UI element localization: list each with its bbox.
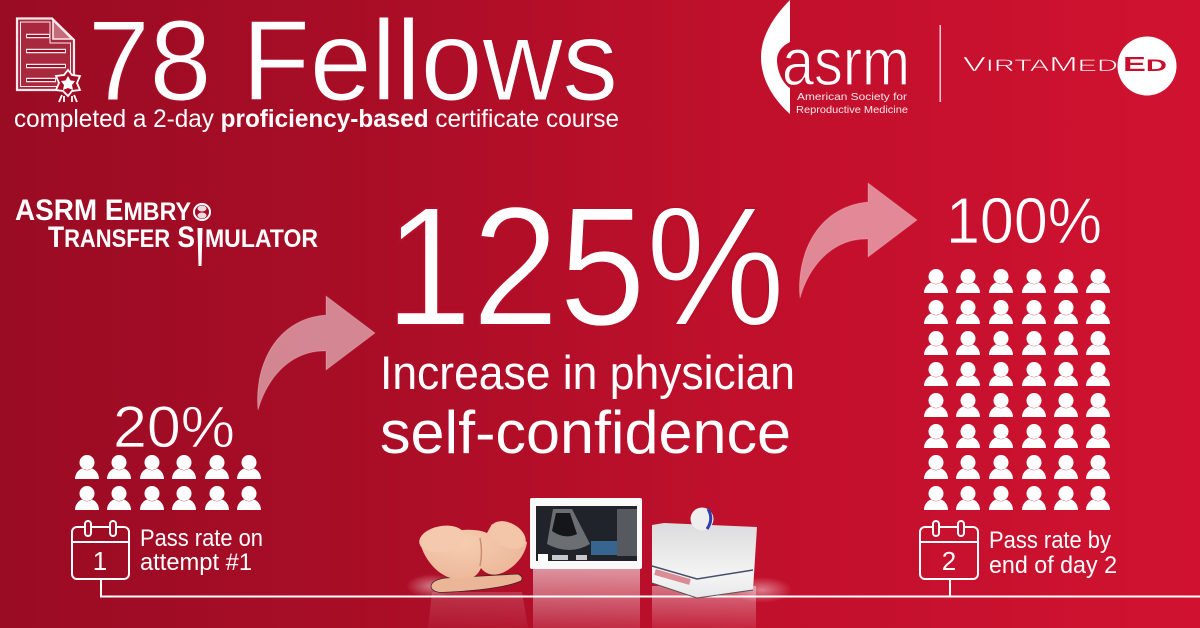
subtitle: completed a 2-day proficiency-based certificate course xyxy=(14,105,619,133)
icon: certificate xyxy=(17,18,80,102)
title: 78 Fellows: 78 Fellows xyxy=(88,0,618,125)
icon: calendar day 1: 1 xyxy=(93,546,107,576)
arrow: 125% to 100% xyxy=(799,183,917,298)
logo: VirtaMed Ed: V IRTA M ED xyxy=(963,54,1118,76)
simulator: pelvic model xyxy=(417,515,530,592)
logo: VirtaMed Ed xyxy=(963,36,1176,96)
people grid: 20% xyxy=(75,455,261,510)
text: increase in physician: Increase in physician xyxy=(380,346,795,399)
logo: VirtaMed Ed: E D xyxy=(1123,54,1167,76)
text: pass rate on attempt 1: attempt #1 xyxy=(140,549,252,576)
simulator: box with probe xyxy=(652,508,757,598)
arrow: 20% to 125% xyxy=(257,296,375,410)
text: pass rate on attempt 1: Pass rate on xyxy=(140,525,263,552)
text: self-confidence: self-confidence xyxy=(380,399,791,466)
icon: calendar day 2: 2 xyxy=(942,546,956,576)
stat: 20%: 20% xyxy=(113,395,235,460)
icon: calendar day 2 xyxy=(920,521,978,579)
reflections under simulator xyxy=(406,569,792,628)
logo: ASRM: American Society for xyxy=(797,91,908,103)
divider between logos xyxy=(940,25,941,102)
big stat: 125%: 125% xyxy=(385,172,785,362)
logo: ASRM: asrm xyxy=(782,25,910,100)
text: pass rate by end of day 2: Pass rate by xyxy=(989,527,1111,554)
logo: ASRM Embryo Transfer Simulator: ASRM EMBRY xyxy=(15,194,191,227)
stat: 100%: 100% xyxy=(946,184,1102,257)
logo: ASRM xyxy=(761,0,910,116)
icon: calendar day 1 xyxy=(72,521,129,579)
logo: ASRM Embryo Transfer Simulator xyxy=(15,194,318,266)
logo: ASRM: Reproductive Medicine xyxy=(796,104,908,116)
timeline line xyxy=(101,579,1200,596)
logo: ASRM Embryo Transfer Simulator: TRANSFER S xyxy=(48,221,195,254)
people grid: 100% xyxy=(924,269,1110,510)
simulator: monitor xyxy=(530,498,642,569)
text: pass rate by end of day 2: end of day 2 xyxy=(989,552,1117,579)
logo: ASRM Embryo Transfer Simulator: MULATOR xyxy=(205,225,318,253)
